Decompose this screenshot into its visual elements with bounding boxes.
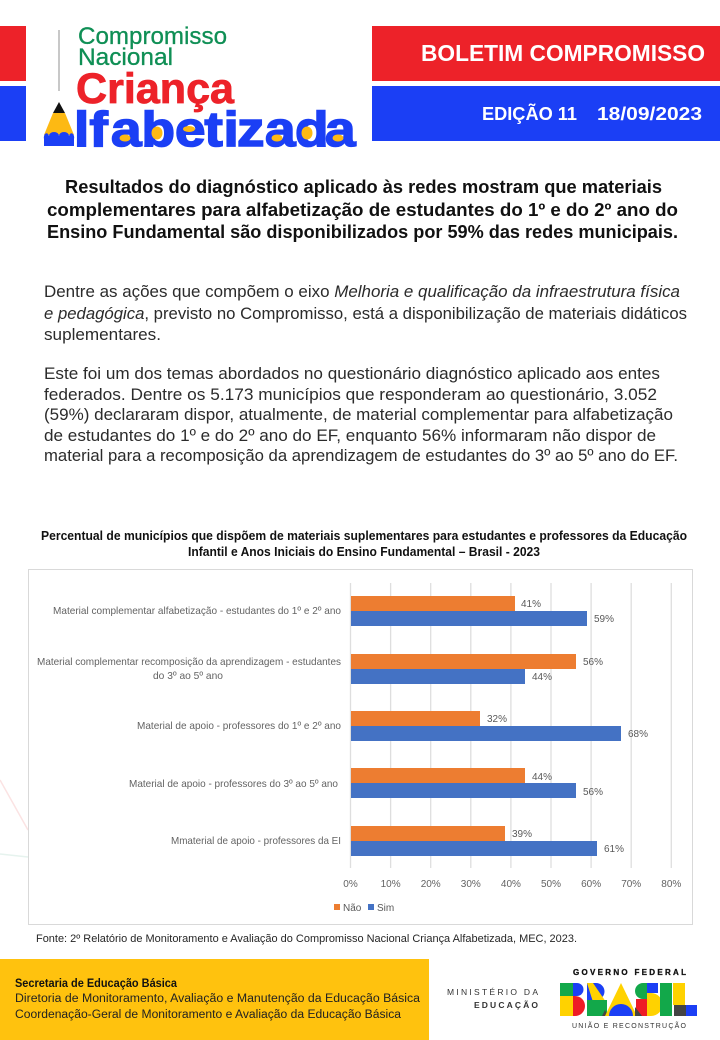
body paragraph 1: suplementares. [44,325,161,344]
bars: no (orange) [351,596,576,841]
chart title: Infantil e Anos Iniciais do Ensino Fundamental – Brasil - 2023 [188,545,540,559]
value labels: 68% [628,729,648,740]
headline: Resultados do diagnóstico aplicado às redes mostram que materiais [65,177,662,197]
category labels: Material de apoio - professores do 3º ao 5º ano [129,778,338,790]
legend: Sim [377,903,394,914]
value labels: 32% [487,714,507,725]
body paragraph 2: (59%) declararam dispor, atualmente, de material complementar para alfabetização [44,405,673,424]
value labels: 39% [512,829,532,840]
x axis labels: 70% [621,879,641,890]
x axis labels [343,879,681,890]
banner: Boletim Compromisso [372,26,720,81]
header band: left accent [0,26,26,141]
x axis labels: 0% [343,879,358,890]
logo: Ministério da Educação: EDUCAÇÃO [474,1000,538,1010]
footer panel: secretaria [0,959,429,1040]
category labels: Material complementar recomposição da aprendizagem - estudantes [37,656,341,668]
x axis labels: 20% [421,879,441,890]
logo: Compromisso Nacional Criança Alfabetizada [44,23,357,157]
banner: Boletim Compromisso: BOLETIM COMPROMISSO [421,40,705,66]
logo: Ministério da Educação: MINISTÉRIO DA [447,987,538,997]
body paragraph 1: e pedagógica, previsto no Compromisso, está a disponibilização de materiais didáticos [44,304,687,323]
logo: Compromisso Nacional Criança Alfabetizada: Compromisso [78,23,227,50]
category labels: Material complementar alfabetização - estudantes do 1º e 2º ano [53,605,341,617]
x axis labels: 80% [661,879,681,890]
footer panel: secretaria: Diretoria de Monitoramento, Avaliação e Manutenção da Educação Básica [15,993,421,1005]
legend [334,903,394,914]
logo: Compromisso Nacional Criança Alfabetizada: Criança [76,65,235,113]
value labels: 59% [594,614,614,625]
body paragraph 2 [44,364,678,465]
body paragraph 1 [44,282,687,344]
headline: Ensino Fundamental são disponibilizados por 59% das redes municipais. [47,222,678,242]
logo: Compromisso Nacional Criança Alfabetizada: Nacional [78,44,173,71]
legend: Não [343,903,362,914]
x axis labels: 40% [501,879,521,890]
logo: Governo Federal Brasil: GOVERNO FEDERAL [573,968,686,977]
logo: Ministério da Educação [447,987,538,1010]
value labels: 44% [532,672,552,683]
banner: edition and date: 18/09/2023 [597,104,702,124]
category labels: Material de apoio - professores do 1º e 2º ano [137,720,341,732]
x axis labels: 10% [381,879,401,890]
footer panel: secretaria: Secretaria de Educação Básica [15,978,178,990]
footer panel: secretaria: Coordenação-Geral de Monitoramento e Avaliação da Educação Básica [15,1009,402,1021]
body paragraph 2: Este foi um dos temas abordados no questionário diagnóstico aplicado aos entes [44,364,660,383]
body paragraph 2: de estudantes do 1º e do 2º ano do EF, enquanto 56% informaram não dispor de [44,426,656,445]
value labels [487,599,648,855]
logo: Compromisso Nacional Criança Alfabetizada: lfabetizada [74,103,357,157]
value labels: 56% [583,787,603,798]
headline: complementares para alfabetização de estudantes do 1º e do 2º ano do [47,200,678,220]
value labels: 44% [532,772,552,783]
value labels: 61% [604,844,624,855]
chart title [41,529,687,559]
logo: Governo Federal Brasil [560,968,697,1030]
banner: edition and date [372,86,720,141]
body paragraph 2: material para a recomposição da aprendizagem de estudantes do 3º ao 5º ano do EF. [44,446,678,465]
x axis labels: 60% [581,879,601,890]
logo: Governo Federal Brasil: UNIÃO E RECONSTRUÇÃO [572,1021,687,1030]
chart title: Percentual de municípios que dispõem de materiais suplementares para estudantes e professores da Educação [41,529,687,543]
category labels: do 3º ao 5º ano [153,670,223,682]
value labels: 41% [521,599,541,610]
body paragraph 1: Dentre as ações que compõem o eixo Melhoria e qualificação da infraestrutura física [44,282,680,301]
bar chart [28,570,692,924]
headline [47,177,678,242]
category labels: Mmaterial de apoio - professores da EI [171,835,341,847]
body paragraph 2: federados. Dentre os 5.173 municípios que responderam ao questionário, 3.052 [44,385,657,404]
bars: yes (blue) [351,611,621,856]
value labels: 56% [583,657,603,668]
x axis labels: 30% [461,879,481,890]
x axis labels: 50% [541,879,561,890]
source note: Fonte: 2º Relatório de Monitoramento e Avaliação do Compromisso Nacional Criança Alfabetizada, MEC, 2023. [36,933,577,945]
banner: edition and date: EDIÇÃO 11 [482,103,577,124]
category labels [37,605,341,847]
